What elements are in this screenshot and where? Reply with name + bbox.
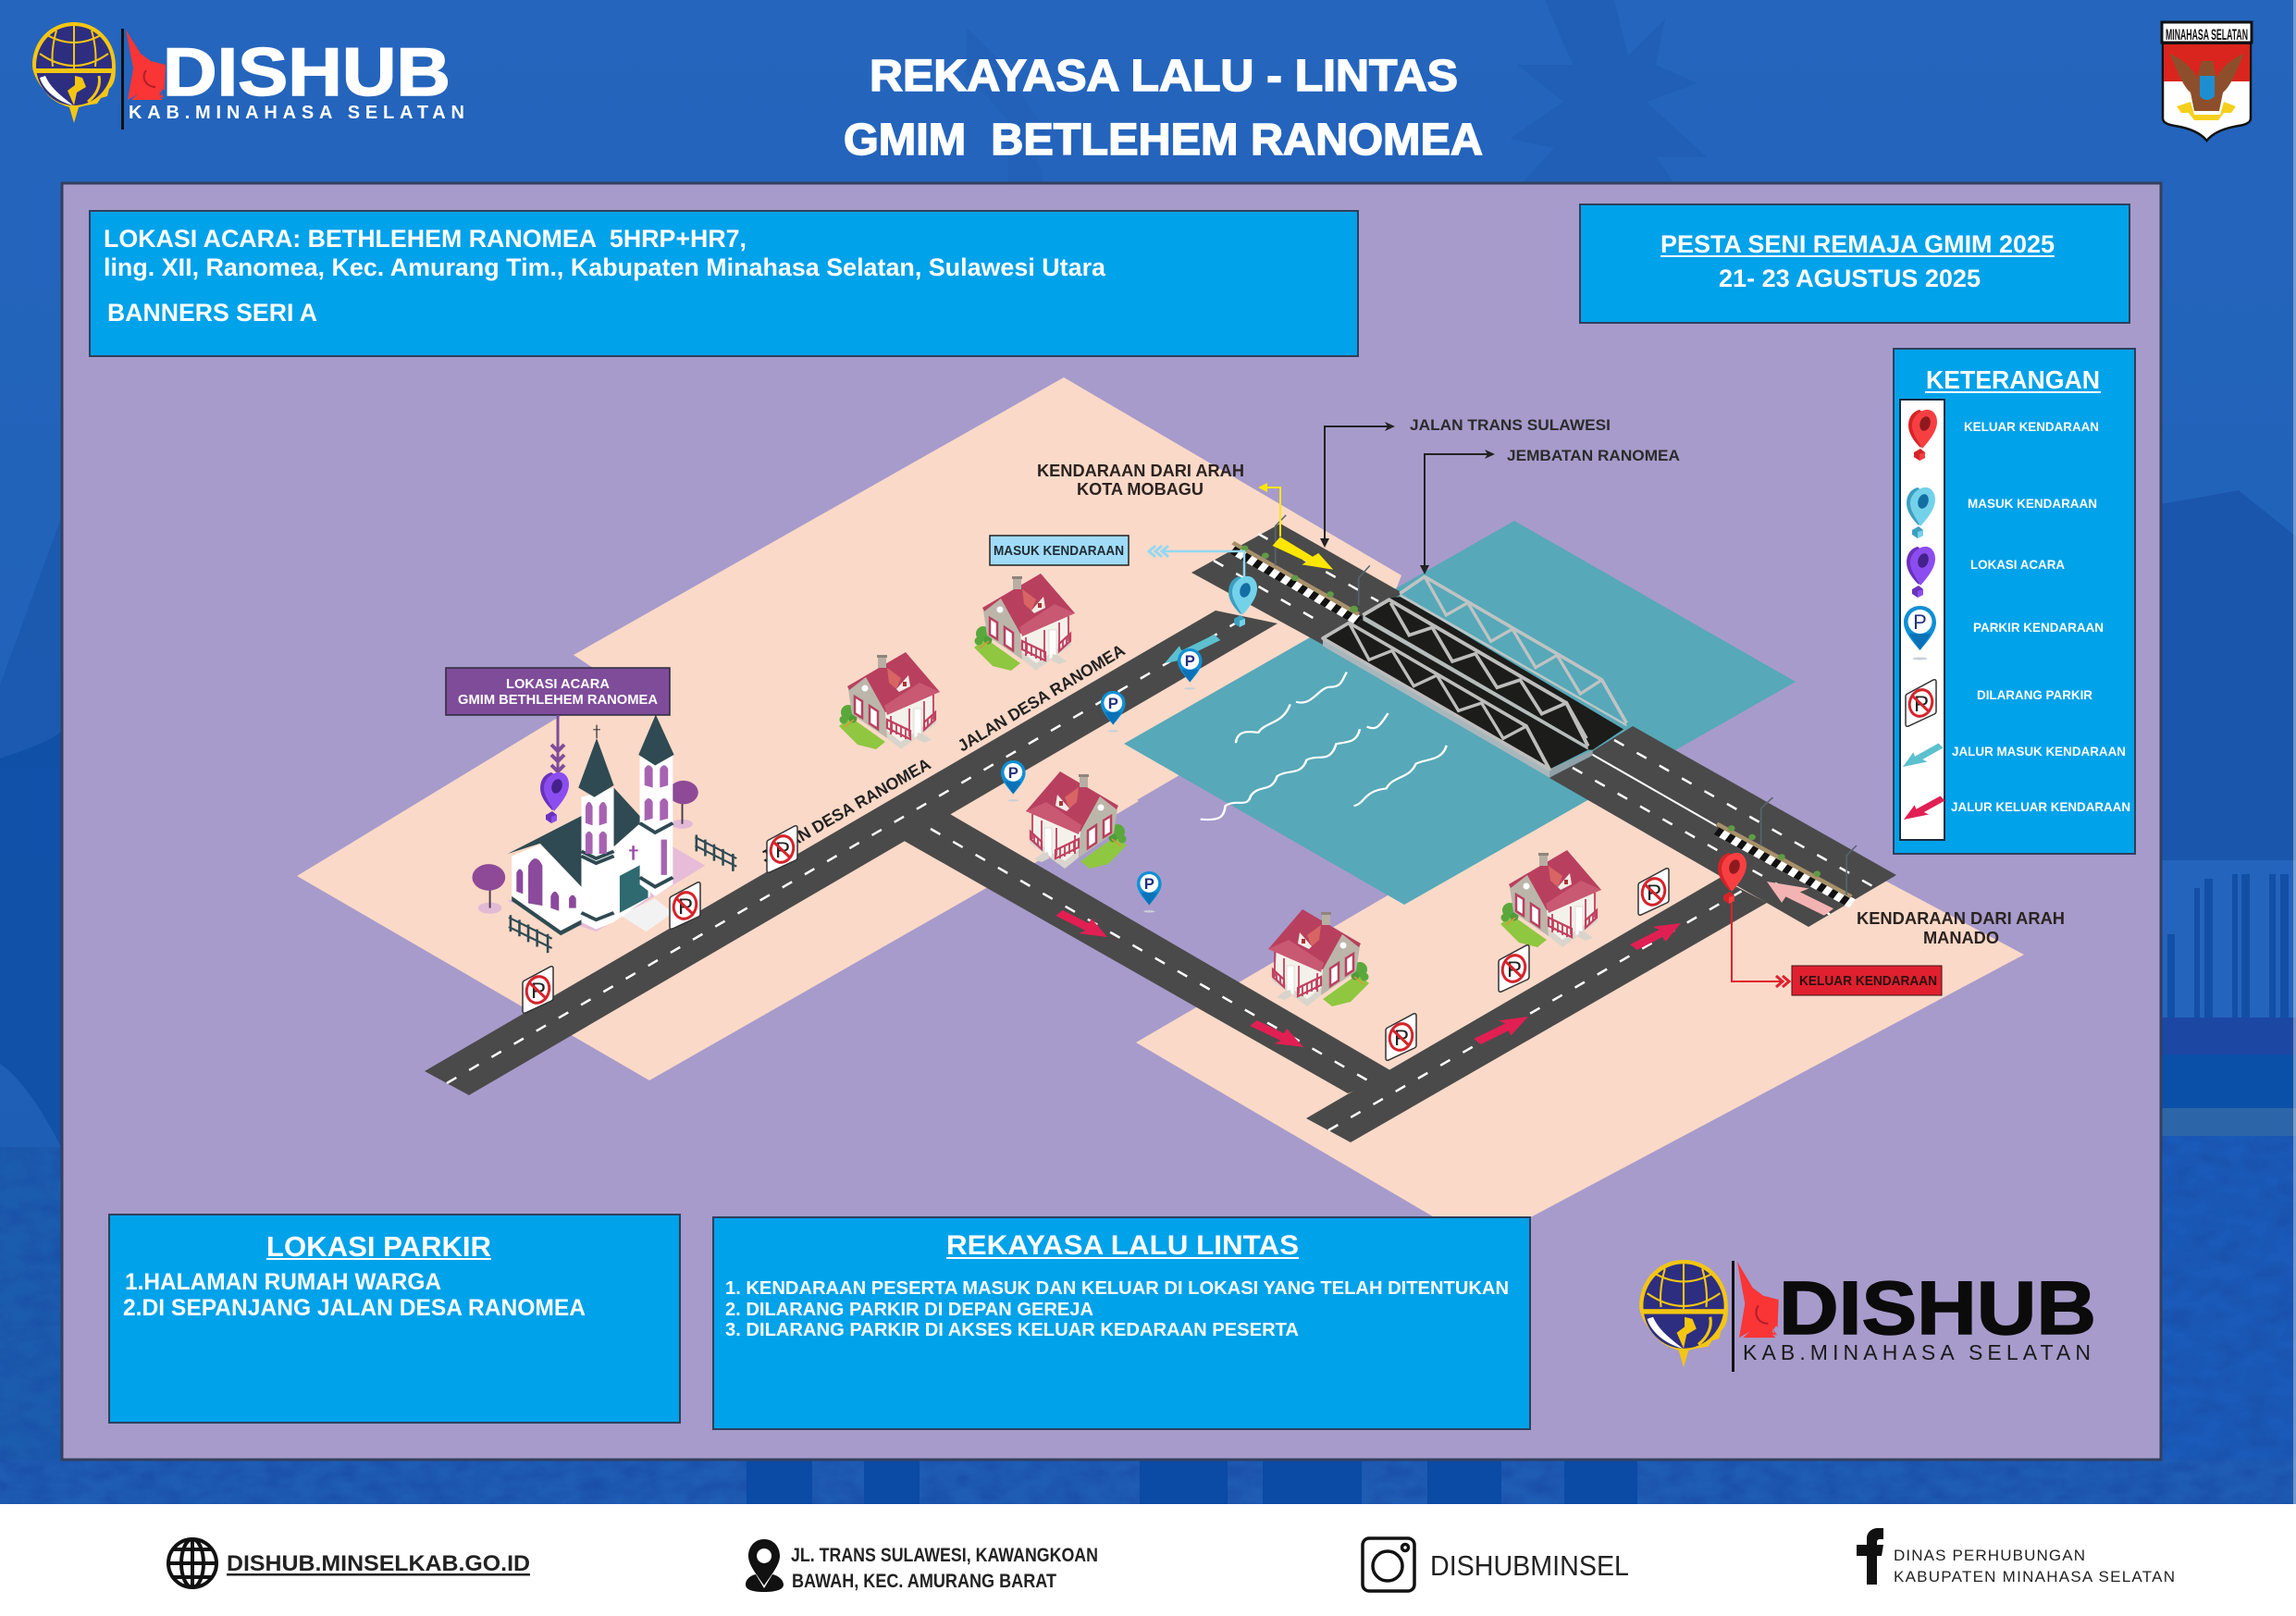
road arrow: keluar 2 bbox=[1245, 1017, 1312, 1054]
panel: lokasi parkir: 1.HALAMAN RUMAH WARGA bbox=[125, 1269, 441, 1295]
footer: website bbox=[168, 1539, 530, 1587]
callout: jalan trans sulawesi bbox=[1320, 416, 1611, 548]
callout: keluar kendaraan: KELUAR KENDARAAN bbox=[1799, 974, 1937, 989]
road arrow: yellow entry bbox=[1273, 537, 1333, 570]
no parking sign 3: P bbox=[775, 838, 790, 863]
pin: masuk kendaraan bbox=[1228, 576, 1257, 627]
legend icon: parkir: P bbox=[1913, 611, 1927, 634]
callout: kendaraan dari arah kota mobagu: KOTA MOBAGU bbox=[1077, 480, 1204, 499]
footer: instagram: DISHUBMINSEL bbox=[1430, 1549, 1629, 1582]
road name: Jalan Desa Ranomea upper: JALAN DESA RANOMEA bbox=[955, 641, 1128, 755]
legend icon: lokasi bbox=[1907, 547, 1935, 598]
callout: kendaraan dari arah manado: KENDARAAN DARI ARAH bbox=[1857, 909, 2065, 928]
panel: rekayasa lalu lintas: 3. DILARANG PARKIR DI AKSES KELUAR KEDARAAN PESERTA bbox=[725, 1320, 1299, 1340]
footer: address: JL. TRANS SULAWESI, KAWANGKOAN bbox=[791, 1545, 1098, 1566]
no parking sign 2 bbox=[670, 882, 700, 929]
legend labels: KELUAR KENDARAAN bbox=[1964, 419, 2099, 434]
callout: jembatan ranomea bbox=[1420, 447, 1680, 574]
legend labels bbox=[1951, 419, 2130, 814]
legend heading: KETERANGAN bbox=[1926, 365, 2100, 394]
parking pin 3 bbox=[1178, 648, 1203, 689]
panel: lokasi parkir bbox=[109, 1215, 680, 1423]
legend icon: masuk bbox=[1907, 487, 1935, 538]
map: roads bbox=[425, 524, 1896, 1142]
panel: event date bbox=[1580, 204, 2129, 323]
title: GMIM BETLEHEM RANOMEA bbox=[844, 116, 1483, 165]
no parking sign 4 bbox=[1386, 1014, 1416, 1060]
parking pin 4: P bbox=[1144, 875, 1154, 893]
map: river waves bbox=[1201, 672, 1447, 820]
legend labels: PARKIR KENDARAAN bbox=[1973, 620, 2104, 635]
parking pin 3: P bbox=[1185, 652, 1195, 670]
panel: event date: 21- 23 AGUSTUS 2025 bbox=[1719, 265, 1981, 292]
road arrow: keluar 1 bbox=[1051, 907, 1116, 944]
logo: Dishub lower panel bbox=[1639, 1260, 2096, 1372]
church bbox=[472, 714, 736, 953]
panel: event date: PESTA SENI REMAJA GMIM 2025 bbox=[1660, 230, 2055, 258]
no parking sign 1 bbox=[523, 967, 553, 1013]
house 5 bbox=[1500, 850, 1601, 947]
footer: facebook: KABUPATEN MINAHASA SELATAN bbox=[1894, 1568, 2175, 1585]
label: lokasi acara: LOKASI ACARA bbox=[506, 676, 610, 692]
no parking sign 6 bbox=[1638, 869, 1669, 915]
panel: rekayasa lalu lintas: 2. DILARANG PARKIR DI DEPAN GEREJA bbox=[725, 1300, 1093, 1320]
title: REKAYASA LALU - LINTAS bbox=[870, 52, 1458, 101]
map: peach ground areas bbox=[297, 377, 2024, 1244]
legend icon: parkir bbox=[1904, 606, 1936, 660]
legend labels: MASUK KENDARAAN bbox=[1968, 496, 2097, 511]
main panel bbox=[62, 183, 2161, 1460]
callout: kendaraan dari arah kota mobagu: KENDARAAN DARI ARAH bbox=[1037, 462, 1244, 480]
legend labels: JALUR KELUAR KENDARAAN bbox=[1951, 799, 2130, 814]
pin: keluar kendaraan bbox=[1718, 853, 1747, 904]
panel: rekayasa lalu lintas bbox=[713, 1217, 1530, 1429]
panel: lokasi parkir: 2.DI SEPANJANG JALAN DESA RANOMEA bbox=[123, 1295, 586, 1321]
legend icon strip bbox=[1900, 400, 1944, 840]
arrow: lokasi acara to pin bbox=[551, 715, 564, 772]
callout: kendaraan dari arah kota mobagu bbox=[1037, 462, 1280, 537]
panel: lokasi parkir: LOKASI PARKIR bbox=[266, 1230, 491, 1263]
house 3 bbox=[1026, 771, 1127, 869]
map: river bbox=[1124, 521, 1796, 905]
legend icon: jalur masuk bbox=[1897, 740, 1946, 772]
parking pin 4 bbox=[1137, 871, 1162, 912]
panel: lokasi acara: LOKASI ACARA: BETHLEHEM RANOMEA 5HRP+HR7, bbox=[104, 225, 747, 253]
callout: kendaraan dari arah manado: MANADO bbox=[1923, 929, 1999, 947]
panel: rekayasa lalu lintas: 1. KENDARAAN PESERTA MASUK DAN KELUAR DI LOKASI YANG TELAH DITENTUKAN bbox=[725, 1278, 1509, 1299]
logo: Dishub header: KAB.MINAHASA SELATAN bbox=[129, 103, 464, 123]
road arrow: keluar 3 bbox=[1469, 1010, 1537, 1048]
icon: map pin bbox=[746, 1539, 784, 1592]
callout: masuk kendaraan: MASUK KENDARAAN bbox=[994, 544, 1124, 559]
road arrow: teal entry bbox=[1157, 631, 1225, 670]
panel: lokasi acara: ling. XII, Ranomea, Kec. Amurang Tim., Kabupaten Minahasa Selatan, Sulawesi Utara bbox=[104, 253, 1106, 281]
no parking sign 1: P bbox=[531, 979, 546, 1004]
legend icon: dilarang parkir: P bbox=[1914, 692, 1929, 717]
logo: Dishub header bbox=[32, 22, 464, 130]
legend labels: JALUR MASUK KENDARAAN bbox=[1952, 744, 2126, 759]
legend icon: jalur keluar bbox=[1898, 793, 1948, 825]
callout: keluar kendaraan bbox=[1732, 903, 1942, 995]
panel: lokasi acara bbox=[90, 211, 1358, 356]
footer: facebook: DINAS PERHUBUNGAN bbox=[1894, 1547, 2085, 1564]
footer: address: BAWAH, KEC. AMURANG BARAT bbox=[792, 1571, 1056, 1592]
icon: facebook f bbox=[1857, 1528, 1883, 1585]
callout: jembatan ranomea: JEMBATAN RANOMEA bbox=[1507, 447, 1680, 464]
road arrow: pink entry bbox=[1756, 873, 1840, 920]
no parking sign 6: P bbox=[1647, 881, 1661, 906]
legend icon: dilarang parkir bbox=[1906, 680, 1936, 726]
parking pin 1 bbox=[1001, 760, 1026, 801]
pin: lokasi acara bbox=[540, 772, 569, 823]
house 2 bbox=[839, 652, 940, 749]
logo: Dishub lower panel: KAB.MINAHASA SELATAN bbox=[1743, 1340, 2091, 1364]
no parking sign 4: P bbox=[1394, 1026, 1409, 1051]
callout: masuk kendaraan bbox=[990, 536, 1244, 578]
parking pin 1: P bbox=[1008, 764, 1018, 782]
house 1 bbox=[974, 574, 1075, 671]
callout: jalan trans sulawesi: JALAN TRANS SULAWESI bbox=[1410, 416, 1611, 434]
parking pin 2: P bbox=[1108, 695, 1118, 712]
no parking sign 2: P bbox=[678, 894, 693, 919]
legend icon: keluar bbox=[1908, 410, 1937, 461]
no parking sign 3 bbox=[767, 826, 797, 872]
panel: lokasi acara: BANNERS SERI A bbox=[107, 299, 317, 327]
label: lokasi acara bbox=[446, 668, 670, 715]
icon: globe bbox=[168, 1539, 216, 1587]
icon: instagram bbox=[1363, 1538, 1414, 1591]
callout: kendaraan dari arah manado bbox=[1857, 909, 2065, 947]
footer: website: DISHUB.MINSELKAB.GO.ID bbox=[227, 1551, 530, 1576]
map: road medians with lamps bbox=[1233, 515, 1857, 904]
panel: keterangan legend bbox=[1894, 349, 2135, 854]
legend labels: LOKASI ACARA bbox=[1970, 557, 2065, 572]
road arrow: keluar 4 bbox=[1625, 917, 1689, 954]
footer: instagram bbox=[1363, 1538, 1629, 1591]
label: lokasi acara: GMIM BETHLEHEM RANOMEA bbox=[458, 692, 658, 708]
footer: address bbox=[746, 1539, 1098, 1592]
footer white band bbox=[0, 1504, 2296, 1616]
house 4 bbox=[1268, 909, 1369, 1006]
icon: Minahasa Selatan shield bbox=[2162, 22, 2252, 141]
title bbox=[844, 52, 1483, 165]
logo: Dishub lower panel: DISHUB bbox=[1779, 1266, 2096, 1351]
no parking sign 5: P bbox=[1507, 957, 1522, 982]
footer: facebook bbox=[1857, 1528, 2175, 1585]
logo: Dishub header: DISHUB bbox=[163, 35, 451, 110]
parking pin 2 bbox=[1101, 691, 1126, 732]
legend labels: DILARANG PARKIR bbox=[1977, 687, 2092, 702]
road name: Jalan Desa Ranomea lower: JALAN DESA RANOMEA bbox=[758, 755, 933, 866]
no parking sign 5 bbox=[1499, 945, 1529, 992]
panel: rekayasa lalu lintas: REKAYASA LALU LINTAS bbox=[946, 1230, 1299, 1261]
map: bridge Ranomea bbox=[1323, 576, 1626, 778]
